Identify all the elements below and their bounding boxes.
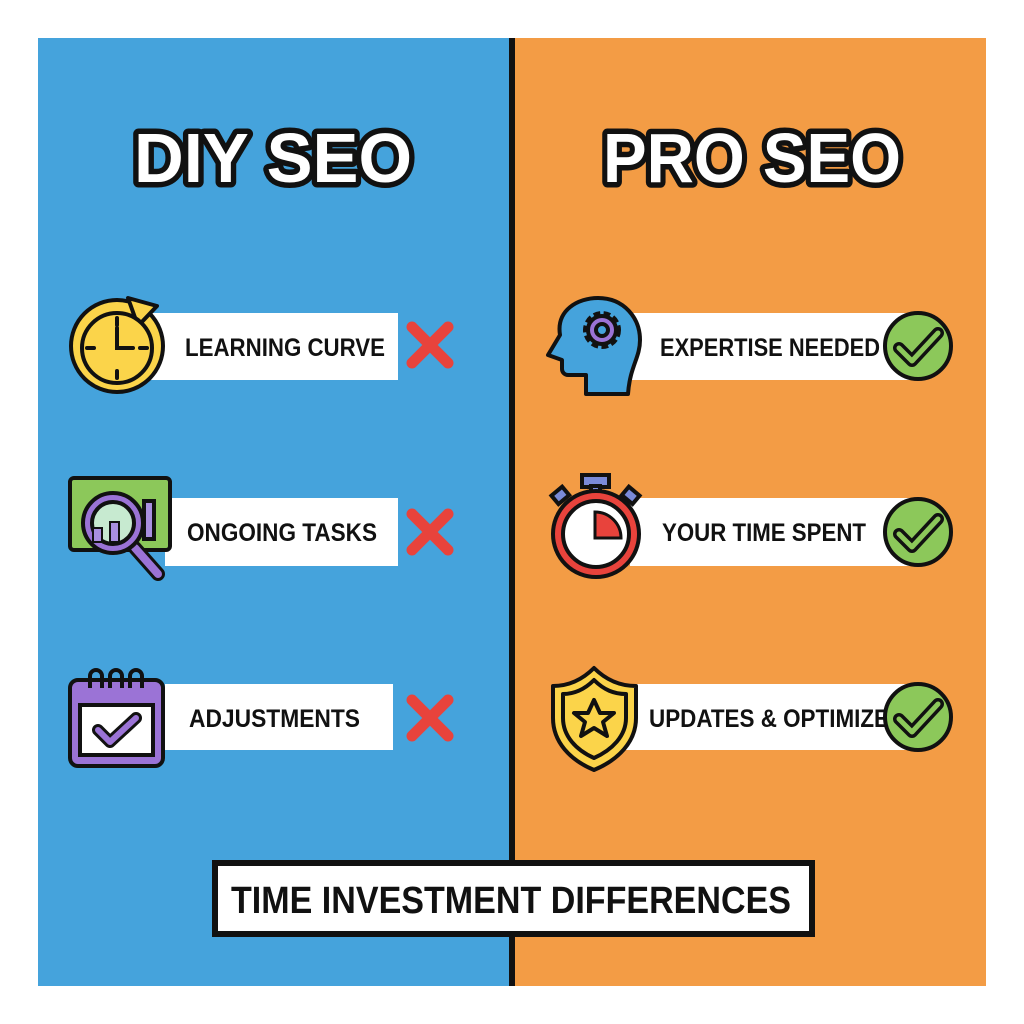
icon: red x	[412, 700, 448, 736]
icon: check circle	[885, 313, 951, 379]
row: updates & optimize	[553, 668, 951, 770]
panel: DIY SEO	[38, 38, 512, 986]
panel: PRO SEO	[514, 38, 986, 986]
icon: magnifier chart	[70, 478, 170, 574]
footer banner	[215, 863, 812, 934]
icon: red x	[412, 514, 448, 550]
row: ongoing tasks	[70, 478, 448, 574]
icon: check circle	[885, 499, 951, 565]
row: your time spent: YOUR TIME SPENT	[662, 519, 866, 547]
heading: DIY SEO: DIY SEO	[134, 119, 412, 197]
footer banner: TIME INVESTMENT DIFFERENCES	[231, 880, 791, 922]
icon: head with gear	[548, 298, 640, 394]
icon: clock	[71, 298, 163, 392]
icon: red x	[412, 327, 448, 363]
row: adjustments: ADJUSTMENTS	[189, 705, 360, 733]
row: expertise needed: EXPERTISE NEEDED	[660, 334, 880, 362]
row: updates & optimize: UPDATES & OPTIMIZE	[649, 705, 889, 733]
row: your time spent	[551, 475, 951, 577]
row: learning curve	[71, 298, 448, 392]
icon: check circle	[885, 684, 951, 750]
icon: calendar	[70, 670, 163, 766]
icon: stopwatch	[551, 475, 640, 577]
row: learning curve: LEARNING CURVE	[185, 334, 385, 362]
row: ongoing tasks: ONGOING TASKS	[187, 519, 377, 547]
row: expertise needed	[548, 298, 951, 394]
row: adjustments	[70, 670, 448, 766]
heading: PRO SEO: PRO SEO	[603, 119, 901, 197]
icon: shield star	[553, 668, 636, 770]
